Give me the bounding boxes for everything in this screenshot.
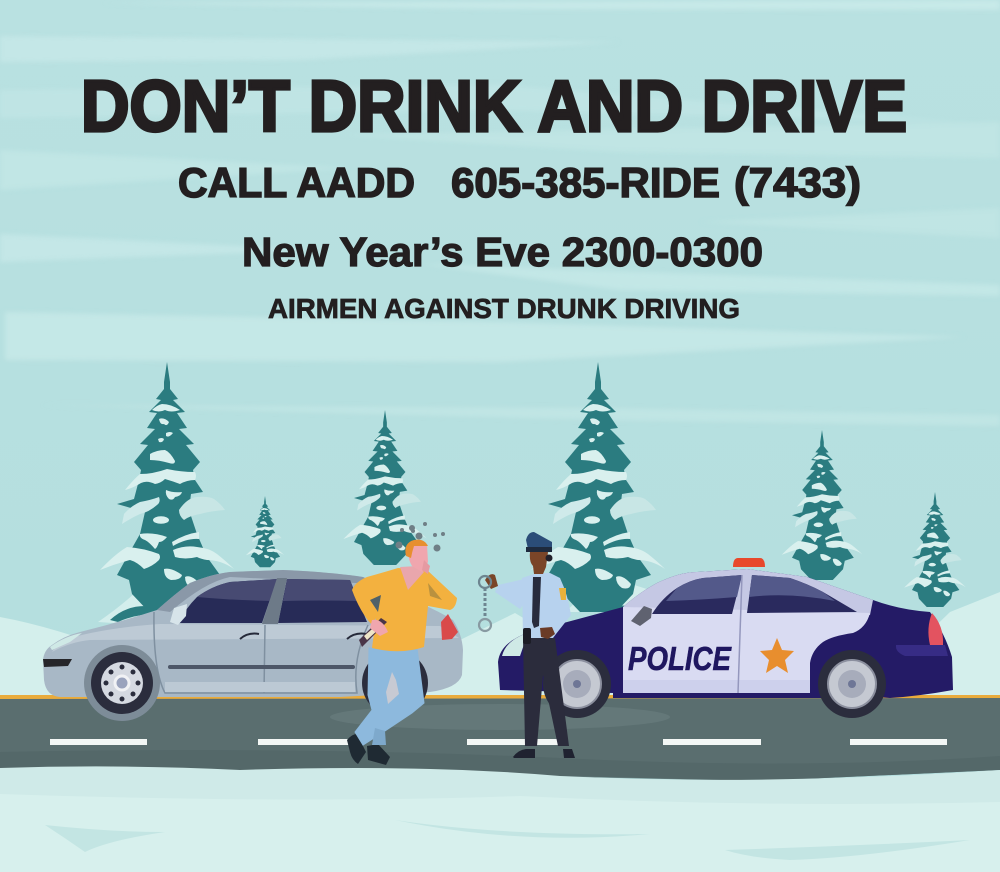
bottle xyxy=(359,618,387,647)
rear wheel xyxy=(818,650,886,718)
silver car xyxy=(43,570,463,721)
tree 6 xyxy=(904,492,966,607)
tree 1 xyxy=(98,362,240,628)
door details xyxy=(154,612,368,693)
head xyxy=(408,542,428,572)
tail light xyxy=(441,614,458,640)
door line xyxy=(738,575,742,693)
rear window xyxy=(747,575,857,613)
handcuffs xyxy=(479,576,491,631)
head xyxy=(530,552,548,574)
snow hills behind road xyxy=(0,592,1000,700)
shoes xyxy=(347,734,366,764)
service hours: New Year’s Eve 2300-0300 xyxy=(242,229,763,275)
call label: CALL AADD xyxy=(178,159,415,206)
torn knee xyxy=(386,672,399,704)
phone number: 605-385-RIDE xyxy=(451,159,720,206)
drunk man xyxy=(347,522,457,765)
front headlight xyxy=(502,633,528,656)
star badge xyxy=(760,638,794,673)
rear wheel xyxy=(362,650,428,716)
dizzy bubbles xyxy=(396,522,445,552)
collar and neck xyxy=(400,566,424,590)
yellow road edge xyxy=(0,695,1000,700)
tree 4 xyxy=(531,362,665,612)
foreground snow xyxy=(0,766,1000,872)
headlight xyxy=(50,633,82,650)
tree 5 xyxy=(782,430,862,580)
shirt xyxy=(522,573,571,638)
rear window xyxy=(278,579,367,623)
hat xyxy=(526,532,552,549)
white door panel xyxy=(623,607,870,693)
organization name: AIRMEN AGAINST DRUNK DRIVING xyxy=(268,293,740,324)
police car xyxy=(498,558,953,718)
hands and wrists xyxy=(540,627,555,639)
trousers xyxy=(523,638,569,746)
front window xyxy=(652,575,742,614)
phone hand xyxy=(422,560,430,574)
phone line xyxy=(178,159,861,206)
front window xyxy=(178,579,277,623)
lane markings xyxy=(50,739,947,745)
jeans xyxy=(355,648,424,745)
POLICE lettering: POLICE xyxy=(628,640,732,677)
tree 3 xyxy=(343,410,427,565)
hand xyxy=(370,620,388,636)
shoulder patch xyxy=(559,588,566,600)
pillar xyxy=(262,578,287,624)
front wheel xyxy=(84,645,160,721)
side mirror xyxy=(170,604,187,625)
tail light xyxy=(928,613,943,645)
road xyxy=(0,698,1000,781)
radio xyxy=(523,628,531,644)
tie xyxy=(532,577,541,628)
shoes xyxy=(513,749,535,758)
front wheel xyxy=(543,650,611,718)
phone digits: (7433) xyxy=(734,159,861,206)
roof lights xyxy=(733,558,765,567)
police officer xyxy=(479,532,575,758)
side mirror xyxy=(631,606,652,626)
title: DON’T DRINK AND DRIVE xyxy=(81,67,907,147)
tree 2 xyxy=(246,496,284,567)
raised arm xyxy=(495,579,530,609)
rear bumper highlight xyxy=(896,645,948,656)
sweater xyxy=(352,568,457,651)
